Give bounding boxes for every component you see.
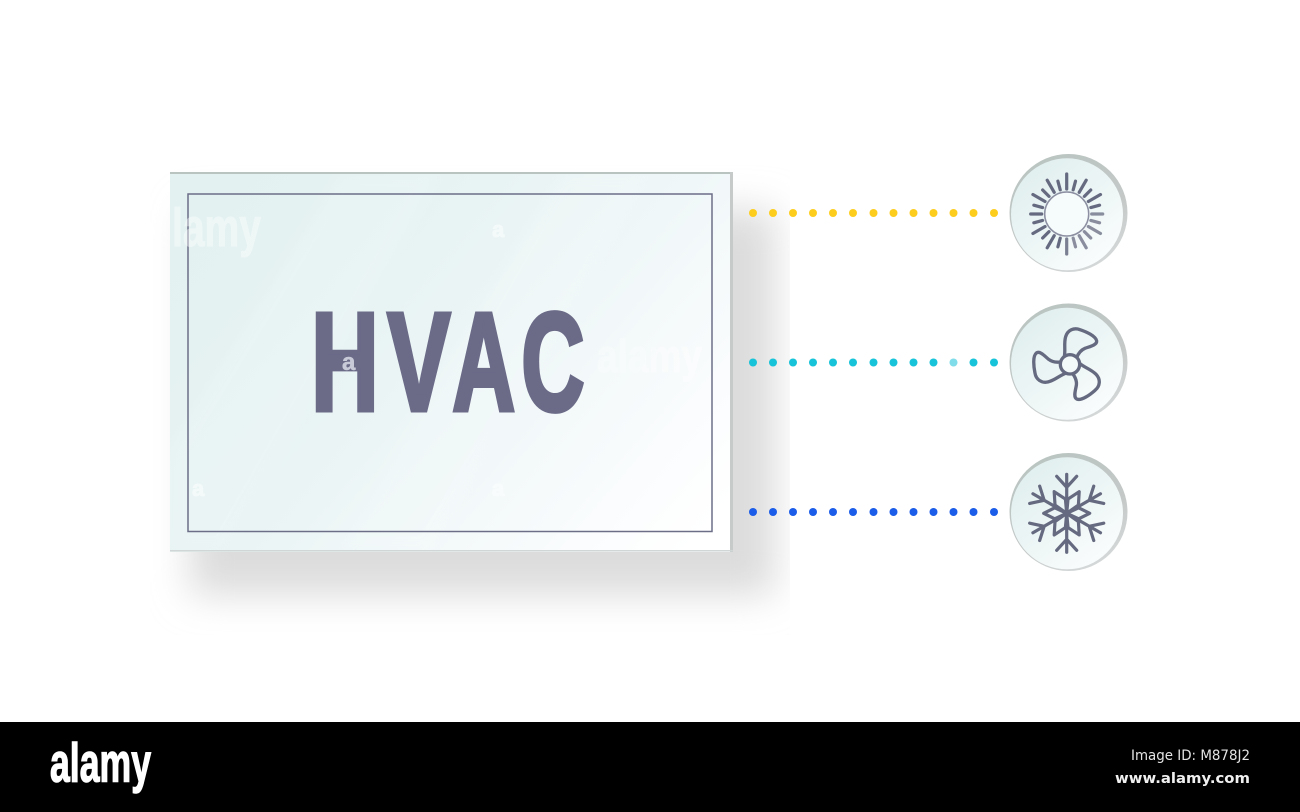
heading: HVAC: H bbox=[311, 284, 379, 440]
watermarks: lamy bbox=[172, 198, 261, 258]
dotted connector: teal bbox=[749, 358, 998, 366]
watermarks: a bbox=[192, 476, 205, 501]
heading: HVAC: V bbox=[388, 284, 450, 440]
icon: snowflake in circle bbox=[1010, 453, 1128, 571]
heading: HVAC: A bbox=[452, 284, 515, 440]
footer text: website: www.alamy.com bbox=[1115, 771, 1250, 787]
footer logo: alamy: alamy bbox=[50, 732, 151, 794]
watermarks bbox=[172, 198, 702, 501]
watermarks: alamy bbox=[597, 330, 702, 382]
icon: sun in circle bbox=[1010, 154, 1128, 272]
panel shadow bbox=[190, 210, 775, 595]
dotted connector: yellow bbox=[749, 209, 998, 217]
watermarks: a bbox=[492, 476, 505, 501]
watermarks: a bbox=[342, 349, 356, 376]
icon: fan in circle bbox=[1010, 304, 1128, 422]
panel: HVAC card bbox=[170, 172, 733, 552]
footer text: image ID: Image ID: M878J2 bbox=[1131, 748, 1250, 764]
heading: HVAC: C bbox=[521, 284, 584, 440]
watermarks: a bbox=[492, 217, 505, 242]
dotted connector: blue bbox=[749, 508, 998, 516]
footer bar bbox=[0, 722, 1300, 812]
